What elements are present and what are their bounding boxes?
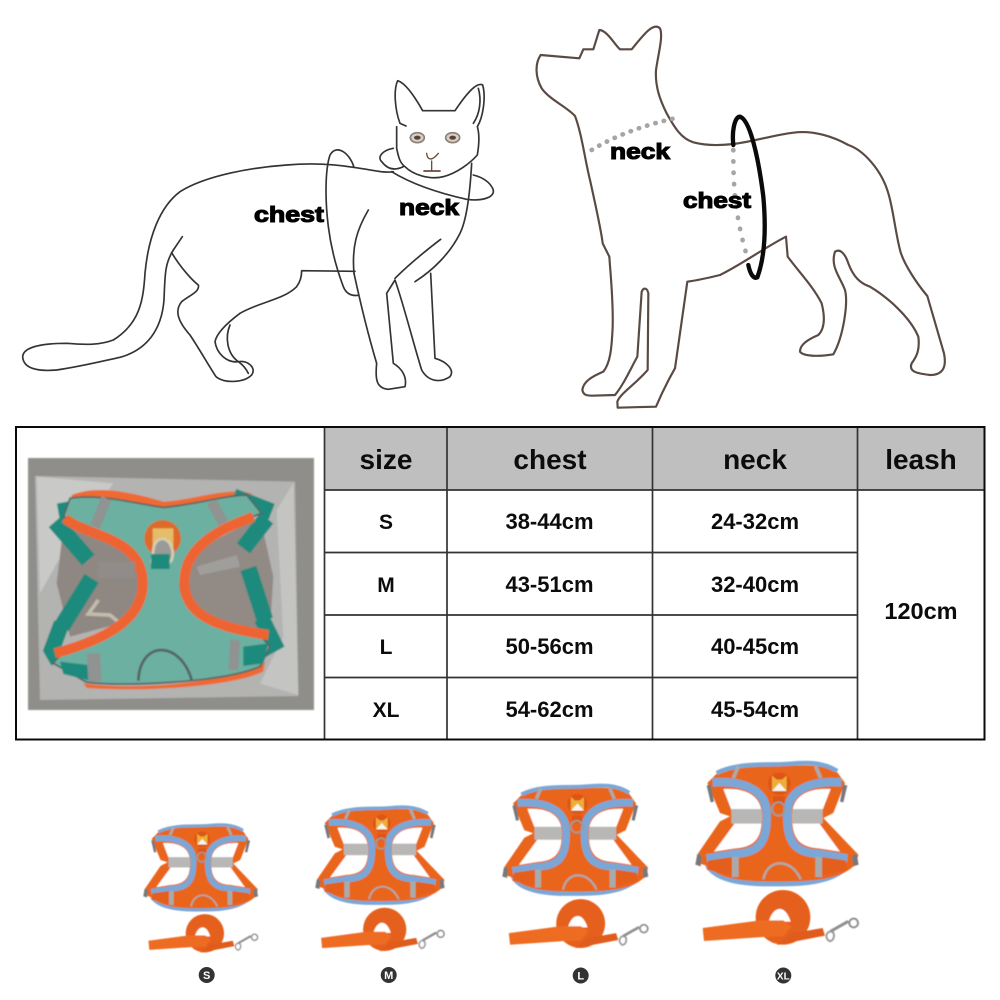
header: chest: chest [513,444,587,475]
label: dog chest: chest [683,188,752,213]
size badge M [381,967,397,983]
row S [379,509,799,534]
row L: 50-56cm [505,634,594,659]
size badge L: L [577,970,584,982]
row M: 32-40cm [711,572,799,597]
cat outline with measure lines [23,81,493,389]
label: cat neck: neck [399,195,460,220]
row S: 24-32cm [711,509,799,534]
row XL [373,697,799,722]
size badge XL [775,968,791,984]
harness and leash: M [315,807,445,951]
row L: L [380,636,393,659]
table header background [325,428,984,490]
label: cat chest: chest [254,202,325,227]
harness and leash: S [143,825,258,953]
harness and leash: L [502,785,648,948]
header: size: size [360,444,412,475]
row S: 38-44cm [505,509,594,534]
row M [377,572,799,597]
label: dog neck: neck [610,139,671,164]
leash length: 120cm [884,598,958,624]
size badge M: M [384,970,393,982]
row L [380,634,799,659]
row XL: 54-62cm [505,697,594,722]
harness and leash: XL [695,763,859,945]
row XL: XL [373,699,400,722]
dog outline with measure lines [537,27,945,408]
size table [16,427,985,740]
row M: 43-51cm [505,572,594,597]
size badge L [573,968,589,984]
row S: S [379,511,393,534]
size badge S: S [203,970,210,982]
row XL: 45-54cm [711,697,799,722]
header: leash: leash [885,444,957,475]
row M: M [377,574,395,597]
size badge XL: XL [777,972,790,982]
size badge S [199,967,215,983]
header: neck: neck [723,444,787,475]
packaged harness photo [28,458,314,710]
row L: 40-45cm [711,634,799,659]
